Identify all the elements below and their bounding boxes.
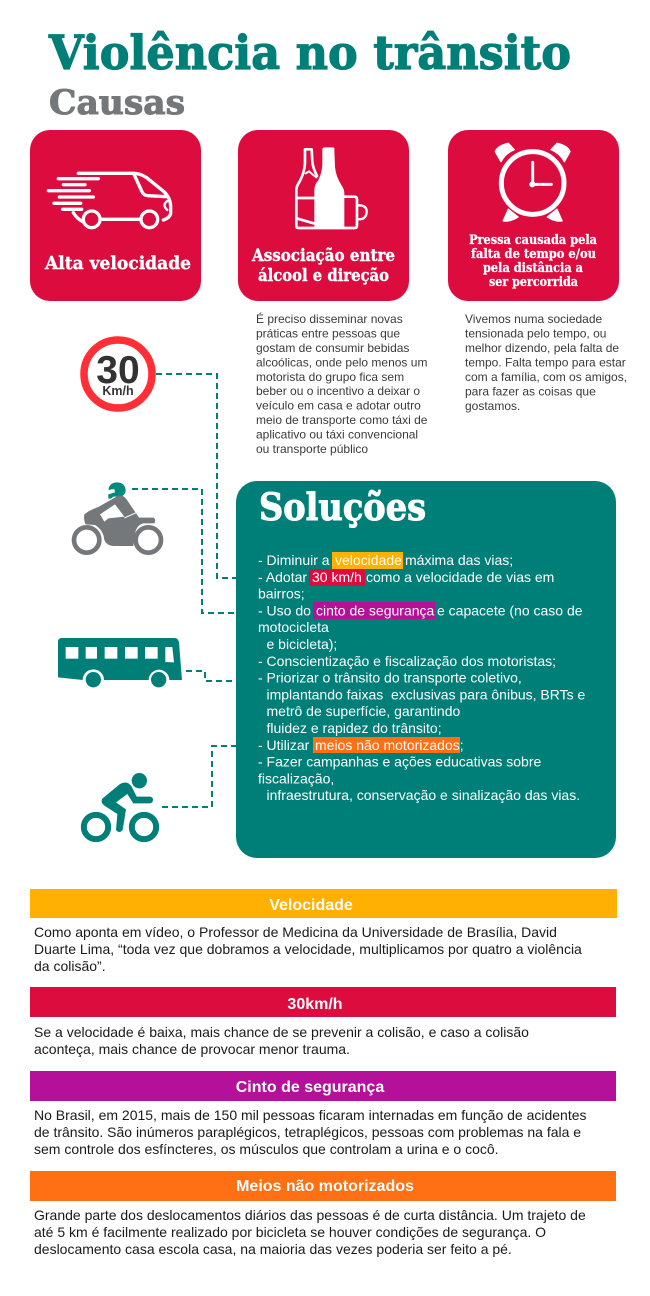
icon: 30 km/h sign: 30: [96, 349, 140, 392]
text block: pressa: tempo. Falta tempo para estar: [465, 356, 626, 370]
section: cinto de seguranca: No Brasil, em 2015, mais de 150 mil pessoas ficaram internadas em função de acidentes: [34, 1107, 587, 1123]
section: velocidade: [30, 889, 617, 974]
text block: alcool: É preciso disseminar novas: [256, 311, 403, 326]
section: 30km/h: [30, 987, 616, 1057]
heading: solucoes: Soluções: [259, 485, 426, 529]
icon: bus: [58, 638, 182, 687]
highlight: 30 km/h: [309, 569, 365, 586]
text block: pressa: gostamos.: [465, 399, 520, 413]
text block: solutions list: - Utilizar: [258, 737, 309, 753]
label: alta velocidade: Alta velocidade: [44, 253, 191, 274]
section: meios nao motorizados: deslocamento casa escola casa, na maioria das vezes poderia ser feito a pé.: [34, 1241, 512, 1257]
text block: solutions list: implantando faixas exclusivas para ônibus, BRTs e: [266, 686, 586, 702]
text block: alcool: motorista do grupo fica sem: [256, 370, 404, 384]
text block: pressa: melhor dizendo, pela falta de: [465, 341, 619, 355]
connector: bus: [186, 671, 236, 681]
label: pressa: Pressa causada pela: [469, 233, 597, 248]
panel: pressa: [448, 130, 619, 301]
text block: alcool: veículo em casa e adotar outro: [256, 399, 421, 413]
text block: pressa: Vivemos numa sociedade: [465, 312, 603, 326]
section: cinto de seguranca: [30, 1071, 616, 1157]
section: cinto de seguranca: sem controle dos esfíncteres, os músculos que controlam a urina e o cocô.: [34, 1141, 499, 1157]
text block: solutions list: cinto de segurança: [316, 602, 435, 618]
text block: solutions list: - Diminuir a: [258, 552, 330, 568]
icon: speeding van: [48, 173, 171, 228]
text block: alcool: ou transporte público: [256, 442, 368, 456]
icon: cyclist: [84, 773, 156, 839]
connector: bike: [162, 746, 236, 807]
text block: pressa: [465, 312, 627, 413]
icon: alarm clock: [495, 143, 570, 221]
section: velocidade: Duarte Lima, “toda vez que dobramos a velocidade, multiplicamos por quatro a violência: [34, 941, 582, 957]
text block: pressa: com a família, com os amigos,: [465, 370, 627, 384]
text block: solutions list: fiscalização,: [258, 770, 334, 786]
panel: solucoes: [236, 481, 616, 858]
text block: alcool: alcoólicas, onde pelo menos um: [256, 355, 427, 369]
text block: alcool: [256, 311, 428, 456]
text block: solutions list: - Conscientização e fiscalização dos motoristas;: [258, 653, 556, 669]
section: velocidade: da colisão”.: [34, 958, 106, 974]
section: cinto de seguranca: Cinto de segurança: [236, 1079, 384, 1096]
text block: solutions list: motocicleta: [258, 619, 329, 635]
text block: solutions list: velocidade: [335, 552, 402, 568]
text block: solutions list: - Priorizar o trânsito do transporte coletivo,: [258, 670, 522, 686]
text block: pressa: tensionada pelo tempo, ou: [465, 326, 606, 340]
label: associacao: [251, 246, 395, 286]
text block: solutions list: meios não motorizados;: [315, 737, 464, 753]
text block: solutions list: 30 km/h: [312, 569, 362, 585]
text block: solutions list: - Uso do: [258, 602, 311, 618]
connector: moto: [132, 489, 236, 613]
icon: 30 km/h sign: Km/h: [102, 384, 134, 398]
label: pressa: falta de tempo e/ou: [471, 247, 596, 262]
label: pressa: pela distância a: [483, 261, 584, 276]
section: meios nao motorizados: [30, 1171, 616, 1257]
icon: motorcycle: [74, 482, 161, 553]
text block: alcool: aplicativo ou táxi convencional: [256, 428, 418, 442]
icon: 30 km/h sign: [84, 340, 152, 408]
text block: solutions list: como a velocidade de vias em: [366, 569, 554, 585]
section: cinto de seguranca: de trânsito. São inúmeros paraplégicos, tetraplégicos, pessoas com problemas na fala e: [34, 1124, 581, 1140]
section: velocidade: Velocidade: [269, 897, 353, 914]
text block: solutions list: infraestrutura, conservação e sinalização das vias.: [266, 787, 580, 803]
title: Violência no trânsito: [48, 26, 571, 81]
text block: solutions list: e capacete (no caso de: [437, 602, 583, 618]
text block: alcool: práticas entre pessoas que: [256, 326, 400, 340]
icon: bottles and mug: [296, 147, 367, 229]
section: 30km/h: 30km/h: [287, 996, 343, 1013]
section: 30km/h: Se a velocidade é baixa, mais chance de se prevenir a colisão, e caso a colisão: [34, 1024, 529, 1040]
text block: solutions list: máxima das vias;: [405, 552, 513, 568]
section: meios nao motorizados: Meios não motorizados: [236, 1178, 414, 1195]
label: associacao: álcool e direção: [258, 266, 389, 286]
panel: alcool e direcao: [238, 130, 409, 301]
connector: 30 km/h: [156, 374, 236, 578]
label: associacao: Associação entre: [251, 246, 395, 266]
text block: alcool: beber ou o incentivo a deixar o: [256, 384, 420, 398]
highlight: meios nao motorizados: [313, 737, 460, 753]
section: 30km/h: aconteça, mais chance de provocar menor trauma.: [34, 1041, 350, 1057]
text block: solutions list: [258, 552, 586, 803]
section: meios nao motorizados: Grande parte dos deslocamentos diários das pessoas é de curta distância. Um trajeto de: [34, 1207, 586, 1223]
text block: solutions list: e bicicleta);: [266, 636, 337, 652]
panel: alta velocidade: [30, 130, 201, 301]
section: meios nao motorizados: até 5 km é facilmente realizado por bicicleta se houver condições de segurança. O: [34, 1224, 546, 1240]
text block: solutions list: bairros;: [258, 586, 305, 602]
highlight: cinto de seguranca: [313, 602, 435, 619]
text block: pressa: para fazer as coisas que: [465, 384, 596, 398]
text block: solutions list: - Adotar: [258, 569, 307, 585]
text block: solutions list: fluidez e rapidez do trânsito;: [266, 720, 442, 736]
text block: alcool: meio de transporte como táxi de: [256, 413, 428, 427]
label: pressa: ser percorrida: [489, 275, 578, 290]
text block: alcool: gostam de consumir bebidas: [256, 341, 409, 355]
text block: solutions list: metrô de superfície, garantindo: [266, 703, 460, 719]
highlight: velocidade: [332, 552, 403, 569]
text block: solutions list: - Fazer campanhas e ações educativas sobre: [258, 754, 541, 770]
label: pressa: [469, 233, 597, 290]
section: velocidade: Como aponta em vídeo, o Professor de Medicina da Universidade de Brasília, David: [34, 924, 557, 940]
heading: causas: Causas: [49, 83, 185, 123]
